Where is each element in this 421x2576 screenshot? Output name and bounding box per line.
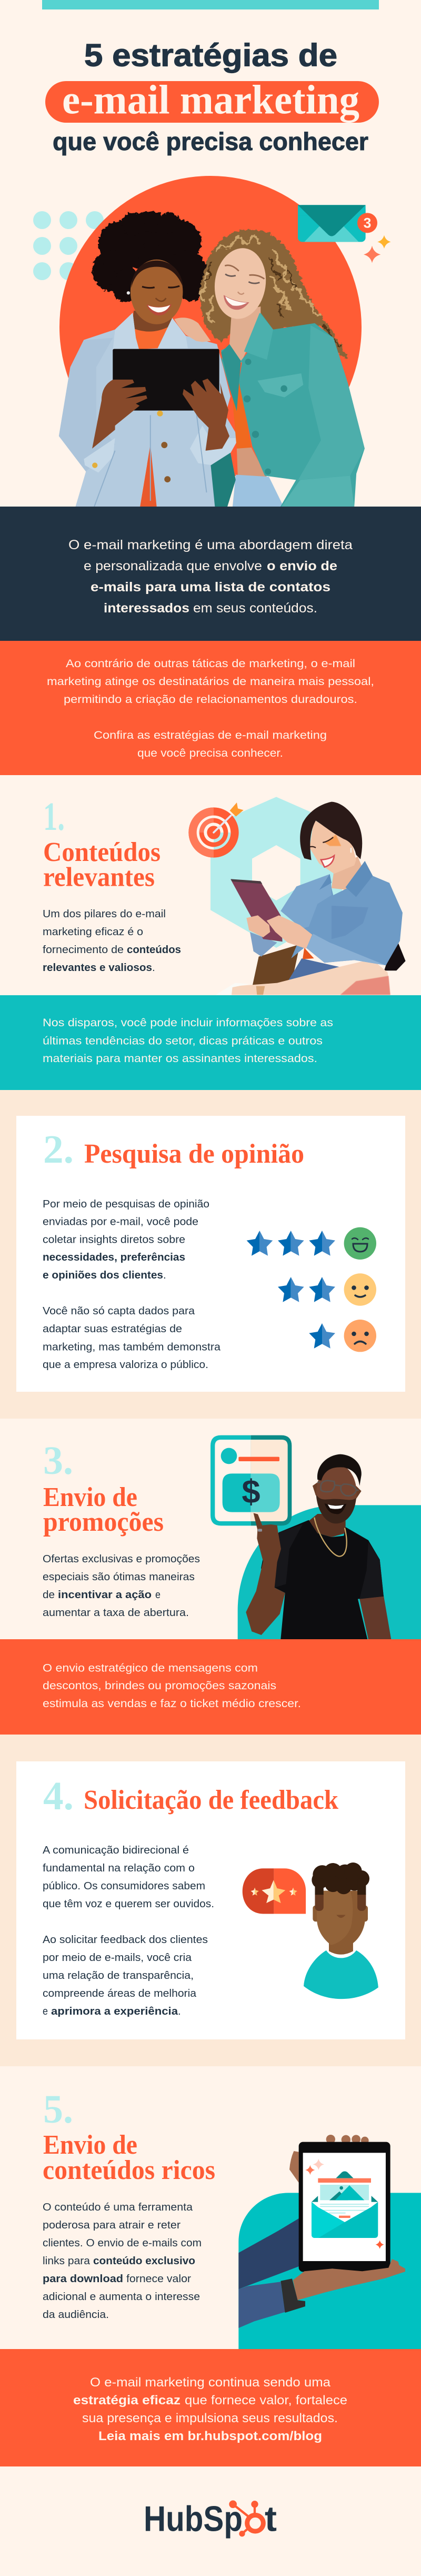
body text 3 xyxy=(43,1553,200,1619)
right woman hand on shoulder xyxy=(174,318,210,342)
fingers and thumb behind tablet xyxy=(289,2135,369,2183)
body text 2: que a empresa valoriza o público. xyxy=(43,1359,208,1371)
gold necklace xyxy=(314,1518,347,1557)
panel: strategy 3 orange note: estimula as vendas e faz o ticket médio crescer. xyxy=(43,1698,301,1710)
heading 3: promoções xyxy=(43,1507,164,1537)
body text 2: enviadas por e-mail, você pode xyxy=(43,1215,198,1228)
icon: email envelope with badge xyxy=(298,205,391,263)
hand xyxy=(293,2259,405,2300)
body text 4: . xyxy=(178,2005,181,2017)
rating row: one star, sad face xyxy=(309,1320,376,1352)
icon: offer card: $ xyxy=(242,1473,260,1510)
body text 4: A comunicação bidirecional é xyxy=(43,1844,189,1856)
panel: strategy 1 teal note: Nos disparos, você pode incluir informações sobre as xyxy=(43,1017,333,1029)
black backrest xyxy=(384,936,406,970)
panel: introduction (orange): Ao contrário de outras táticas de marketing, o e-mail xyxy=(66,658,355,670)
body text 2: necessidades, preferências xyxy=(43,1251,185,1263)
right woman neck xyxy=(229,306,260,363)
panel: conclusion: estratégia eficaz xyxy=(73,2393,181,2407)
top accent bar xyxy=(42,0,379,9)
heading 3: Envio de xyxy=(43,1482,137,1512)
icon: offer card xyxy=(210,1435,292,1525)
logo: HubSpot: t xyxy=(265,2499,277,2539)
body text 1: conteúdos xyxy=(127,944,181,956)
left woman neck and face xyxy=(127,260,183,338)
body text 4: compreende áreas de melhoria xyxy=(43,1987,197,1999)
shoe xyxy=(216,983,249,995)
heading 5: conteúdos ricos xyxy=(43,2155,215,2185)
panel: strategy 4 xyxy=(0,1735,421,2066)
white card 2 xyxy=(16,1116,405,1392)
panel: conclusion: Leia mais em br.hubspot.com/blog xyxy=(98,2429,322,2443)
body text 1: relevantes e valiosos xyxy=(43,962,152,974)
body text 5: links para xyxy=(43,2255,91,2267)
photo: two women with tablet xyxy=(59,212,365,507)
number 1: 1. xyxy=(43,795,65,839)
icon: email envelope with badge: 3 xyxy=(364,215,371,231)
wooden chair xyxy=(253,944,300,985)
body text 2: adaptar suas estratégias de xyxy=(43,1323,182,1335)
jeans xyxy=(288,958,340,982)
jacket buttons xyxy=(92,411,171,482)
body text 5: adicional e aumenta o interesse xyxy=(43,2291,200,2303)
illustration: woman with tablet and target xyxy=(188,797,406,995)
body text 4: por meio de e-mails, você cria xyxy=(43,1951,192,1964)
heading 1: Conteúdos xyxy=(43,837,161,867)
panel: introduction (orange): que você precisa conhecer. xyxy=(137,747,283,759)
body text 5: da audiência. xyxy=(43,2309,109,2321)
panel: introduction (orange) xyxy=(0,641,421,775)
body text 3: de xyxy=(43,1589,55,1601)
body text 1: Um dos pilares do e-mail xyxy=(43,908,166,920)
decorative dots xyxy=(33,211,104,280)
body text 2: e opiniões dos clientes xyxy=(43,1269,163,1281)
number 2: 2. xyxy=(43,1127,74,1172)
left woman orange shirt xyxy=(132,327,168,349)
pointing arm and hand xyxy=(246,1513,285,1635)
illustration: person with star speech bubble xyxy=(243,1862,378,1999)
body text 2: Você não só capta dados para xyxy=(43,1305,195,1317)
panel: introduction (orange): permitindo a criação de relacionamentos duradouros. xyxy=(64,693,357,706)
illustration: hands holding tablet xyxy=(238,2135,421,2350)
body text 4: público. Os consumidores sabem xyxy=(43,1880,205,1892)
body text 2: . xyxy=(163,1269,166,1281)
right woman face xyxy=(210,245,270,322)
body text 5: para download xyxy=(43,2273,123,2285)
body text 3: e xyxy=(155,1589,161,1601)
hexagon xyxy=(210,797,342,948)
heading 1: relevantes xyxy=(43,863,155,892)
body text 4: que têm voz e querem ser ouvidos. xyxy=(43,1898,214,1910)
leg xyxy=(232,959,390,995)
title: 5 estratégias de xyxy=(84,38,337,73)
face xyxy=(309,820,356,874)
neck xyxy=(332,857,364,890)
body text 2: marketing, mas também demonstra xyxy=(43,1341,221,1353)
panel: strategy 3 orange note xyxy=(0,1639,421,1735)
body text 2: Por meio de pesquisas de opinião xyxy=(43,1198,209,1210)
panel: introduction (orange): Confira as estratégias de e-mail marketing xyxy=(94,729,327,741)
title: que você precisa conhecer xyxy=(53,127,368,155)
panel: strategy 1 teal note: últimas tendências do setor, dicas práticas e outros xyxy=(43,1035,323,1047)
heading 5: Envio de xyxy=(43,2130,137,2160)
hero panel xyxy=(33,0,391,507)
heading 3 xyxy=(43,1482,164,1537)
panel: strategy 1 teal note xyxy=(0,995,421,1090)
panel: introduction (navy): e-mails para uma lista de contatos xyxy=(91,580,330,595)
heading 1 xyxy=(43,837,161,892)
illustration: man pointing at offer card xyxy=(210,1435,421,1639)
body text 3: aumentar a taxa de abertura. xyxy=(43,1607,189,1619)
body text 5: fornece valor xyxy=(126,2273,191,2285)
panel: strategy 3 orange note: descontos, brindes ou promoções sazonais xyxy=(43,1680,276,1692)
body text 5: poderosa para atrair e reter xyxy=(43,2219,181,2231)
lower sleeve xyxy=(238,2282,285,2328)
orange circle xyxy=(59,176,362,478)
body text 2 xyxy=(43,1198,221,1371)
panel: conclusion: que fornece valor, fortalece xyxy=(185,2393,347,2407)
panel: strategy 3 orange note: O envio estratégico de mensagens com xyxy=(43,1662,258,1675)
body text 2: coletar insights diretos sobre xyxy=(43,1233,185,1246)
body text 5: O conteúdo é uma ferramenta xyxy=(43,2201,193,2213)
logo: HubSpot: HubSp xyxy=(144,2499,243,2539)
body text 4: Ao solicitar feedback dos clientes xyxy=(43,1934,208,1946)
panel: strategy 5 xyxy=(0,2066,421,2350)
panel: strategy 3 xyxy=(0,1419,421,1639)
speech bubble xyxy=(243,1868,306,1914)
panel: introduction (navy): O e-mail marketing é uma abordagem direta xyxy=(68,538,353,552)
body text 5 xyxy=(43,2201,202,2321)
panel: introduction (navy): o envio de xyxy=(267,559,337,573)
number 5: 5. xyxy=(43,2087,73,2132)
panel: strategy 1 xyxy=(43,795,406,995)
panel: introduction (navy): e personalizada que envolve xyxy=(84,559,262,573)
rating row: two stars, smiling face xyxy=(278,1273,376,1306)
tablet xyxy=(299,2142,390,2272)
title xyxy=(45,38,379,155)
right woman teal jacket and crop top xyxy=(210,313,365,507)
left woman hair xyxy=(92,212,207,302)
body text 4: uma relação de transparência, xyxy=(43,1969,194,1981)
body text 1: . xyxy=(152,962,155,974)
body text 4: aprimora a experiência xyxy=(51,2005,178,2017)
rating row: three stars, laughing face xyxy=(247,1227,376,1260)
neck xyxy=(309,1514,346,1537)
panel: strategy 1 teal note: materiais para manter os assinantes interessados. xyxy=(43,1053,317,1065)
number 3: 3. xyxy=(43,1439,73,1483)
head xyxy=(313,1454,362,1523)
right hand xyxy=(183,379,229,451)
orange top xyxy=(307,904,333,941)
body text 3: incentivar a ação xyxy=(58,1589,152,1601)
right arm xyxy=(359,1596,391,1639)
panel: introduction (navy): em seus conteúdos. xyxy=(193,601,317,616)
title: e-mail marketing xyxy=(62,77,359,122)
body text 1 xyxy=(43,908,181,974)
upper sleeve xyxy=(238,2218,300,2289)
hands xyxy=(246,915,270,937)
body text 3: especiais são ótimas maneiras xyxy=(43,1571,195,1583)
body text 4: e xyxy=(43,2005,48,2017)
teal background shape xyxy=(238,2193,421,2350)
hair xyxy=(300,802,362,860)
black t-shirt xyxy=(261,1520,384,1639)
heading 5 xyxy=(43,2130,215,2185)
denim jacket xyxy=(250,861,403,965)
teal background shape xyxy=(238,1505,421,1639)
panel: introduction (orange): marketing atinge os destinatários de maneira mais pessoal, xyxy=(47,676,374,688)
body text 5: conteúdo exclusivo xyxy=(93,2255,195,2267)
heading 4: Solicitação de feedback xyxy=(84,1785,338,1815)
body text 5: clientes. O envio de e-mails com xyxy=(43,2237,202,2249)
body text 4 xyxy=(43,1844,214,2017)
panel: conclusion xyxy=(0,2349,421,2466)
person xyxy=(304,1862,378,1999)
body text 3: Ofertas exclusivas e promoções xyxy=(43,1553,200,1565)
heading 2: Pesquisa de opinião xyxy=(84,1139,304,1169)
panel: conclusion: sua presença e impulsiona seus resultados. xyxy=(82,2411,338,2425)
body text 4: fundamental na relação com o xyxy=(43,1862,195,1874)
target icon xyxy=(188,802,244,858)
white card 4 xyxy=(16,1761,405,2039)
left hand xyxy=(92,380,147,449)
number 4: 4. xyxy=(43,1774,74,1818)
left woman denim jacket xyxy=(59,313,239,507)
panel: introduction (navy): interessados xyxy=(104,601,189,616)
right woman hair xyxy=(200,230,348,359)
cover hexagon to the right of the head xyxy=(362,811,372,864)
panel: strategy 2 xyxy=(0,1090,421,1419)
tablet xyxy=(113,349,219,411)
panel: introduction (navy) xyxy=(0,507,421,641)
body text 1: marketing eficaz é o xyxy=(43,926,143,938)
body text 1: fornecimento de xyxy=(43,944,124,956)
tablet xyxy=(230,879,283,942)
panel: conclusion: O e-mail marketing continua sendo uma xyxy=(90,2375,331,2390)
watch xyxy=(280,2278,305,2313)
